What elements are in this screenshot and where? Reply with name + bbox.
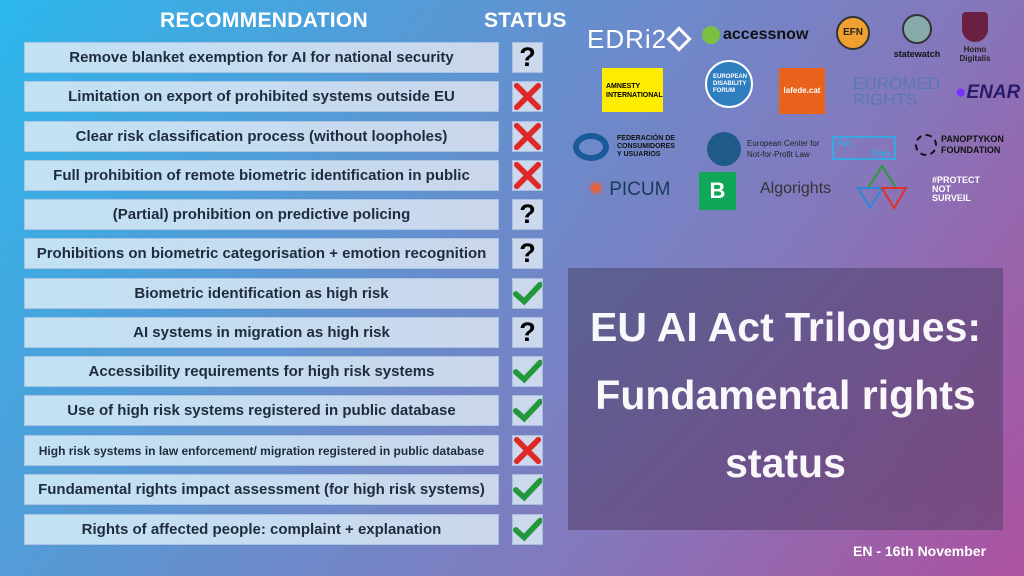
- logo: Euromed Rights: [853, 74, 940, 109]
- status 8: unknown: ?: [519, 317, 536, 347]
- status 8: unknown: [512, 317, 543, 348]
- logo: Amnesty: [602, 68, 663, 112]
- status 7: check: [512, 278, 543, 309]
- row 5: (Partial) prohibition on predictive policing: [113, 206, 410, 223]
- logo: B: [699, 172, 736, 210]
- row 9: [24, 356, 499, 387]
- logo: triangles: [856, 164, 908, 210]
- logo: Fair Trials: Fair: [837, 139, 852, 148]
- logo: Amnesty: INTERNATIONAL: [606, 92, 663, 99]
- logo: EDRi: EDRi2: [587, 24, 667, 54]
- logo: Fair Trials: Trials: [870, 149, 891, 158]
- row 10: [24, 395, 499, 426]
- logo: Panoptykon: FOUNDATION: [941, 145, 1000, 155]
- logo: CECU: [573, 133, 675, 161]
- status 6: unknown: [512, 238, 543, 269]
- logo: Homo Digitalis: [959, 12, 991, 63]
- header: status: STATUS: [484, 9, 567, 32]
- status 2: cross: [512, 81, 543, 112]
- row 3: [24, 121, 499, 152]
- logo: ECNL: European Center for: [747, 139, 820, 148]
- logo: Homo Digitalis: Homo Digitalis: [959, 45, 991, 63]
- row 12: [24, 474, 499, 505]
- row 7: [24, 278, 499, 309]
- status 9: check: [512, 356, 543, 387]
- logo: lafede.cat: lafede.cat: [784, 86, 820, 95]
- row 2: Limitation on export of prohibited systems outside EU: [68, 88, 455, 105]
- logo: Protect Not Surveil: SURVEIL: [932, 193, 971, 203]
- header: recommendation: RECOMMENDATION: [160, 9, 368, 32]
- logo: Protect Not Surveil: #PROTECT: [932, 175, 980, 185]
- logo: Euromed Rights: EUROMED: [853, 74, 940, 93]
- row 13: [24, 514, 499, 545]
- logo: PICUM: ✺ PICUM: [588, 179, 670, 200]
- logo: ENAR: ●ENAR: [955, 82, 1020, 103]
- status 1: unknown: ?: [519, 42, 536, 72]
- logo: Panoptykon: PANOPTYKON: [941, 134, 1004, 144]
- logo: European Disability Forum: [705, 60, 753, 108]
- logo: Protect Not Surveil: [932, 175, 980, 203]
- status 13: check: [512, 514, 543, 545]
- logo: EFN: [836, 16, 870, 50]
- row 5: [24, 199, 499, 230]
- logo: Panoptykon: [915, 134, 1004, 156]
- row 11: [24, 435, 499, 466]
- row 6: [24, 238, 499, 269]
- row 3: Clear risk classification process (without loopholes): [76, 128, 447, 145]
- title panel: [568, 268, 1003, 530]
- logo: Algorights: Algorights: [760, 180, 831, 197]
- logo: EFN: EFN: [843, 27, 863, 38]
- row 4: [24, 160, 499, 191]
- row 13: Rights of affected people: complaint + explanation: [82, 521, 441, 538]
- row 8: AI systems in migration as high risk: [133, 324, 390, 341]
- logo: Euromed Rights: RIGHTS: [853, 90, 917, 109]
- logo: CECU: CONSUMIDORES: [617, 143, 675, 150]
- status 5: unknown: ?: [519, 199, 536, 229]
- title panel: EU AI Act Trilogues:: [590, 304, 981, 350]
- status 11: cross: [512, 435, 543, 466]
- date footer: EN - 16th November: [853, 543, 986, 559]
- status 10: check: [512, 395, 543, 426]
- status 3: cross: [512, 121, 543, 152]
- row 9: Accessibility requirements for high risk systems: [89, 363, 434, 380]
- logo: statewatch: [894, 14, 940, 59]
- logo: Protect Not Surveil: NOT: [932, 184, 951, 194]
- status 4: cross: [512, 160, 543, 191]
- row 1: Remove blanket exemption for AI for national security: [69, 49, 454, 66]
- row 7: Biometric identification as high risk: [134, 285, 389, 302]
- row 1: [24, 42, 499, 73]
- row 8: [24, 317, 499, 348]
- row 2: [24, 81, 499, 112]
- row 12: Fundamental rights impact assessment (for high risk systems): [38, 481, 485, 498]
- status 6: unknown: ?: [519, 238, 536, 268]
- row 11: High risk systems in law enforcement/ migration registered in public database: [39, 444, 484, 458]
- title panel: Fundamental rights: [595, 372, 976, 418]
- logo: statewatch: statewatch: [894, 49, 940, 59]
- logo: B: B: [710, 178, 725, 203]
- status 5: unknown: [512, 199, 543, 230]
- logo: Amnesty: AMNESTY: [606, 83, 640, 90]
- title panel: status: [725, 440, 846, 486]
- logo: Fair Trials: [832, 136, 896, 160]
- logo: CECU: Y USUARIOS: [617, 151, 660, 158]
- status 12: check: [512, 474, 543, 505]
- logos panel: [573, 12, 1020, 210]
- logo: European Disability Forum: EUROPEAN DISABILITY FORUM: [713, 74, 747, 94]
- logo: ECNL: [707, 132, 820, 166]
- row 6: Prohibitions on biometric categorisation + emotion recognition: [37, 245, 486, 262]
- logo: ECNL: Not-for-Profit Law: [747, 150, 810, 159]
- logo: CECU: FEDERACIÓN DE: [617, 135, 675, 142]
- row 4: Full prohibition of remote biometric identification in public: [53, 167, 470, 184]
- status 1: unknown: [512, 42, 543, 73]
- logo: lafede.cat: [779, 68, 825, 114]
- logo: accessnow: accessnow: [723, 26, 808, 43]
- row 10: Use of high risk systems registered in public database: [67, 402, 456, 419]
